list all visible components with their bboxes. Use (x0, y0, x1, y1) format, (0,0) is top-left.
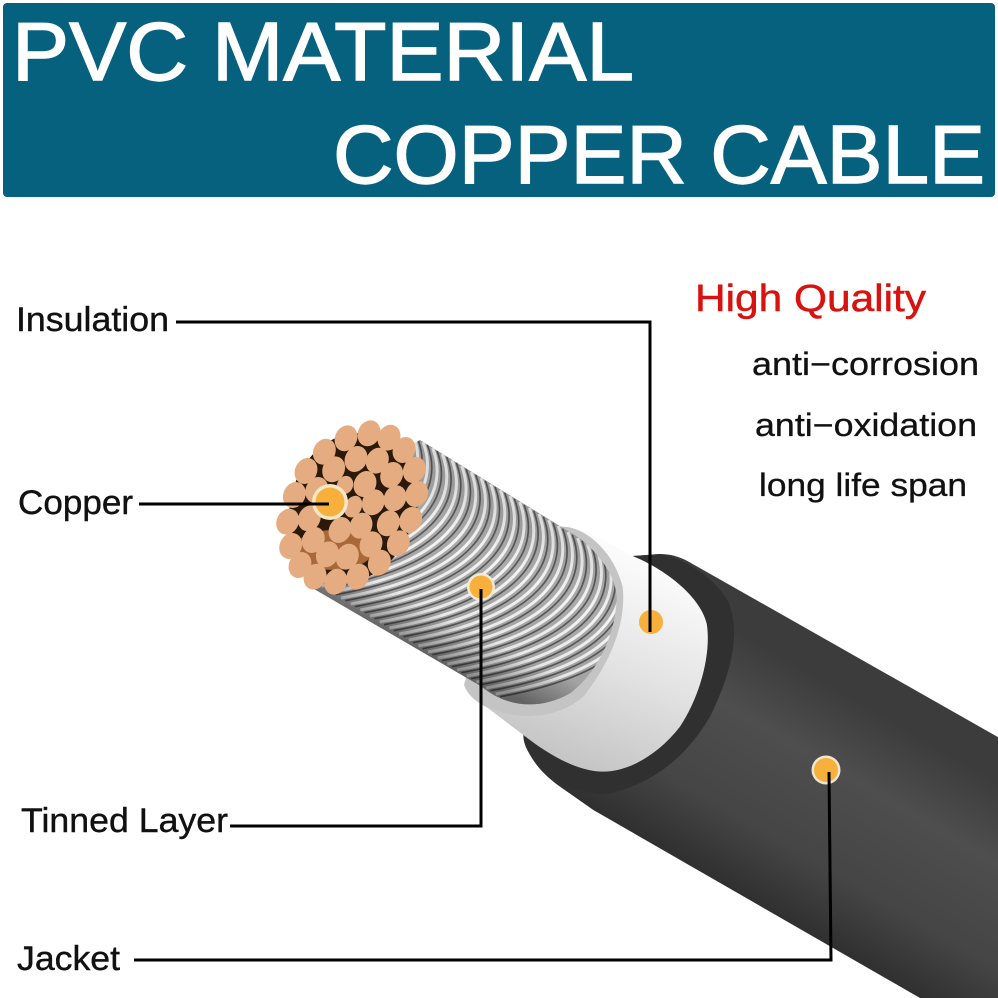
feature: long life span: long life span (759, 467, 967, 503)
marker: copper (312, 484, 348, 520)
label: jacket: Jacket (17, 940, 121, 978)
marker: tinned layer (467, 573, 495, 601)
feature: anti-oxidation: anti−oxidation (755, 407, 977, 443)
title banner (3, 3, 995, 201)
tinned layer (314, 440, 617, 704)
title line 2: COPPER CABLE (333, 108, 985, 201)
feature: anti-corrosion: anti−corrosion (752, 346, 979, 382)
jacket body (523, 554, 998, 998)
insulation lip (464, 527, 623, 716)
leader line: tinned layer (230, 589, 481, 826)
label: copper: Copper (18, 484, 133, 522)
helical strands (322, 440, 616, 698)
jacket end face (523, 554, 734, 794)
insulation layer (482, 527, 708, 772)
label: insulation: Insulation (16, 301, 169, 339)
marker: jacket (812, 756, 840, 784)
leader line: jacket (134, 772, 831, 960)
leader line: copper (139, 502, 329, 506)
leader line: insulation (176, 322, 650, 632)
title line 1: PVC MATERIAL (12, 5, 634, 98)
feature heading: High Quality (695, 278, 926, 320)
label: tinned layer: Tinned Layer (21, 802, 228, 840)
marker: insulation (639, 610, 663, 634)
feature list (695, 278, 979, 503)
copper conductor face (272, 417, 432, 598)
cable illustration (260, 410, 998, 998)
